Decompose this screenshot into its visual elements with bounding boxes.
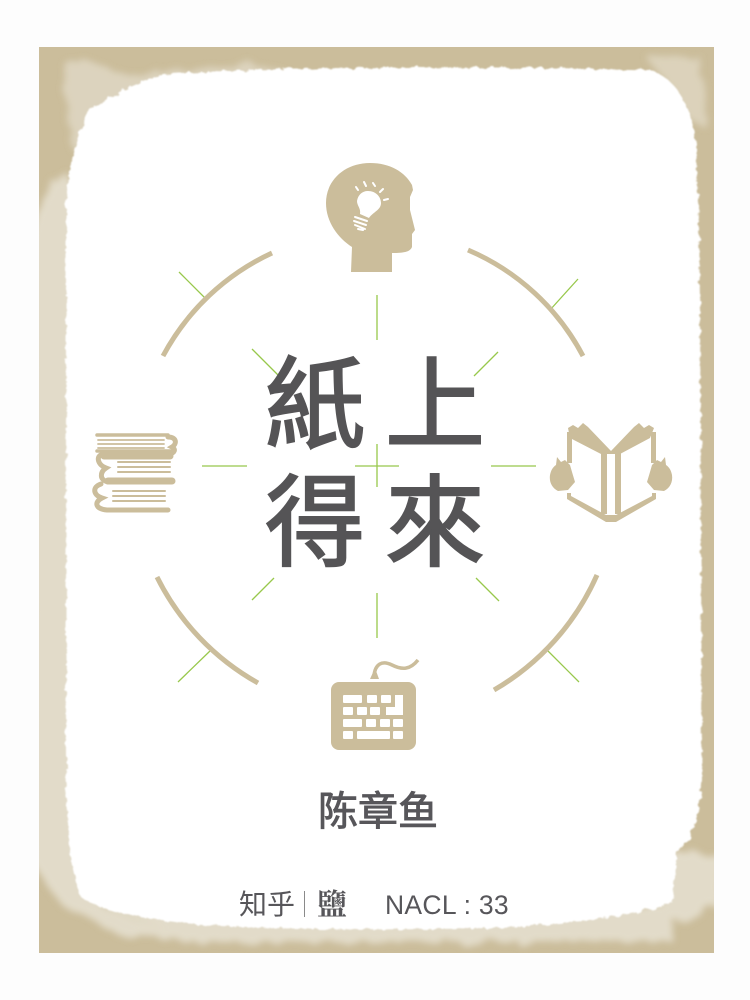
title (265, 350, 485, 580)
footer: publisher and issue: 知乎 (239, 889, 295, 920)
right hand (647, 457, 672, 491)
title: 上 (385, 350, 485, 462)
circular arc segments (157, 250, 597, 690)
title: 得 (265, 468, 365, 580)
icon: keyboard (331, 660, 418, 750)
inner white paper (66, 67, 702, 929)
author name: 陈章鱼 (318, 790, 438, 834)
icon: open book with hands (550, 423, 672, 522)
footer: publisher and issue: 鹽 (317, 880, 347, 924)
left hand (550, 457, 575, 491)
icon: stack of books (95, 435, 175, 510)
footer: publisher and issue: NACL : 33 (385, 890, 509, 920)
icon: head with light bulb (326, 163, 415, 272)
green radial tick lines (178, 272, 579, 682)
footer: publisher and issue (239, 880, 509, 924)
title: 來 (385, 468, 485, 580)
title: 紙 (265, 350, 365, 462)
